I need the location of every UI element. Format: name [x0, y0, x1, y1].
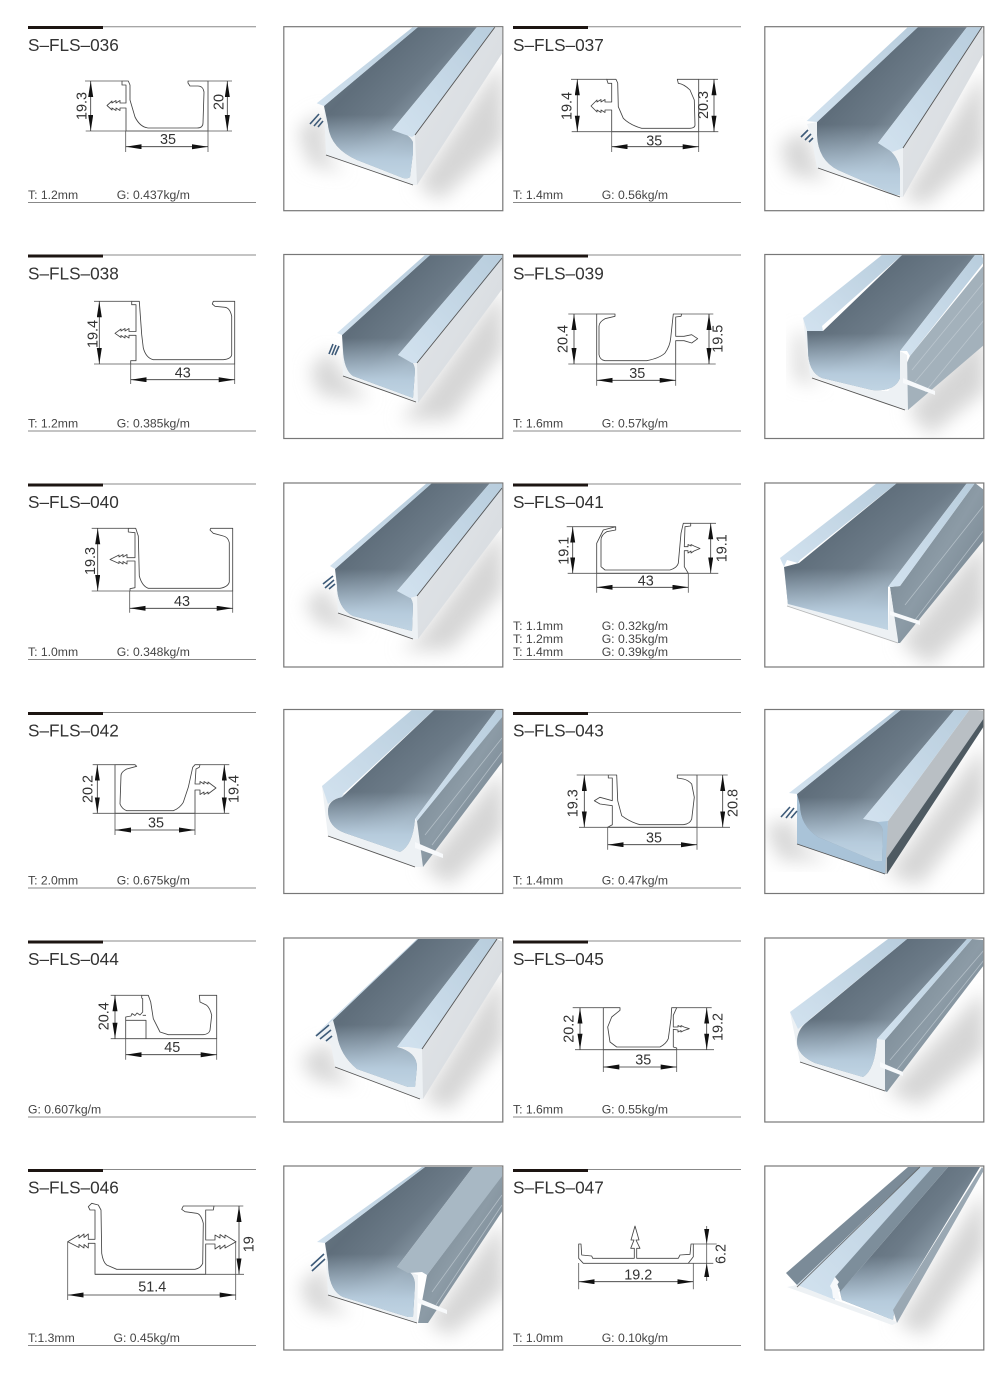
section diagram: 43: [175, 365, 191, 381]
section diagram: 19.4: [85, 320, 101, 348]
title: S–FLS–040: [28, 492, 119, 512]
specifications: G: 0.39kg/m: [602, 645, 668, 659]
product photo: [765, 27, 986, 211]
specifications: T: 1.4mm: [513, 645, 563, 659]
title: S–FLS–037: [513, 35, 604, 55]
product photo: [765, 1166, 986, 1350]
title: S–FLS–045: [513, 949, 604, 969]
section diagram: [85, 301, 235, 384]
panel: S-FLS-045: [513, 938, 986, 1122]
specifications: T: 1.0mm: [28, 645, 78, 659]
specifications: G: 0.32kg/m: [602, 619, 668, 633]
specifications: T: 2.0mm: [28, 874, 78, 888]
panel: S-FLS-040: [28, 483, 504, 667]
header rule: [28, 484, 256, 486]
header rule: [513, 940, 741, 944]
section diagram: [83, 528, 233, 613]
header rule: [513, 712, 741, 715]
panel: S-FLS-039: [513, 254, 986, 438]
specifications: G: 0.385kg/m: [117, 416, 190, 430]
section diagram: 43: [174, 594, 190, 610]
section diagram: 19.5: [711, 325, 727, 353]
panel: S-FLS-046: [28, 1166, 505, 1350]
section diagram: [565, 775, 741, 850]
section diagram: 20.8: [725, 789, 741, 817]
section diagram: 19.1: [715, 534, 731, 562]
height arrows: [704, 1229, 709, 1277]
product photo: [284, 938, 505, 1122]
title: S–FLS–044: [28, 949, 119, 969]
product photo: [284, 1166, 505, 1350]
section diagram: 51.4: [138, 1280, 166, 1296]
specifications: G: 0.57kg/m: [602, 416, 668, 430]
panel: S-FLS-042: [28, 709, 505, 894]
specifications: G: 0.35kg/m: [602, 632, 668, 646]
title: S–FLS–036: [28, 35, 119, 55]
product photo: [765, 709, 986, 894]
section diagram: 6.2: [714, 1244, 730, 1264]
specifications: G: 0.10kg/m: [602, 1331, 668, 1345]
specifications: G: 0.56kg/m: [602, 188, 668, 202]
specifications: G: 0.437kg/m: [117, 188, 190, 202]
specifications: T: 1.6mm: [513, 1102, 563, 1116]
specifications: G: 0.348kg/m: [117, 645, 190, 659]
header rule: [513, 484, 741, 486]
specifications: T: 1.2mm: [28, 416, 78, 430]
section diagram: [96, 995, 217, 1060]
section diagram: 35: [148, 815, 164, 831]
specifications: T: 1.2mm: [28, 188, 78, 202]
title: S–FLS–046: [28, 1178, 119, 1198]
section diagram: [556, 523, 731, 593]
product photo: [284, 709, 505, 894]
section diagram: [81, 765, 242, 835]
section diagram: 20.2: [81, 775, 97, 803]
section diagram: 20.4: [96, 1002, 112, 1030]
title: S–FLS–038: [28, 264, 119, 284]
title: S–FLS–047: [513, 1178, 604, 1198]
section diagram: 20.3: [696, 91, 712, 119]
section diagram: 35: [629, 366, 645, 382]
section diagram: 20: [212, 94, 228, 110]
specifications: [513, 619, 668, 659]
header rule: [28, 254, 256, 258]
section diagram: 35: [646, 134, 662, 150]
section diagram: [68, 1203, 257, 1300]
section diagram: 20.4: [556, 325, 572, 353]
specifications: T: 1.6mm: [513, 416, 563, 430]
section diagram: 19.2: [711, 1013, 727, 1041]
section diagram: 19.3: [83, 547, 99, 575]
section diagram: [75, 81, 232, 152]
section diagram: [556, 314, 727, 386]
section diagram: 35: [646, 830, 662, 846]
title: S–FLS–041: [513, 492, 604, 512]
product photo: [765, 483, 986, 667]
panel: S-FLS-036: [28, 26, 505, 211]
specifications: G: 0.45kg/m: [114, 1331, 180, 1345]
panel: S-FLS-043: [513, 709, 986, 894]
specifications: T: 1.2mm: [513, 632, 563, 646]
section diagram: [561, 1008, 727, 1072]
product photo: [765, 938, 986, 1122]
section diagram: 19.4: [560, 92, 576, 120]
specifications: T: 1.0mm: [513, 1331, 563, 1345]
section diagram: 35: [160, 132, 176, 148]
product photo: [284, 483, 504, 667]
section diagram: 35: [635, 1052, 651, 1068]
section diagram: 45: [164, 1040, 180, 1056]
section diagram: [579, 1226, 730, 1289]
header rule: [28, 1169, 256, 1172]
section diagram: 20.2: [561, 1015, 577, 1043]
section diagram: 19.1: [556, 537, 572, 565]
header rule: [513, 26, 741, 29]
section diagram: 19.2: [624, 1267, 652, 1283]
panel: S-FLS-041: [513, 483, 986, 667]
title: S–FLS–042: [28, 720, 119, 740]
specifications: T: 1.1mm: [513, 619, 563, 633]
product photo: [284, 254, 504, 438]
panel: S-FLS-047: [513, 1166, 986, 1350]
section diagram: 19.3: [565, 789, 581, 817]
header rule: [513, 1169, 741, 1172]
section diagram: 19: [241, 1236, 257, 1252]
header rule: [28, 26, 256, 29]
specifications: T:1.3mm: [28, 1331, 75, 1345]
section diagram: 19.3: [75, 92, 91, 120]
header rule: [28, 712, 256, 715]
panel: S-FLS-037: [513, 26, 986, 211]
header rule: [28, 940, 256, 944]
product photo: [765, 254, 986, 438]
specifications: G: 0.675kg/m: [117, 874, 190, 888]
specifications: G: 0.55kg/m: [602, 1102, 668, 1116]
specifications: G: 0.47kg/m: [602, 874, 668, 888]
specifications: G: 0.607kg/m: [28, 1102, 101, 1116]
panel: S-FLS-044: [28, 938, 505, 1122]
header rule: [513, 254, 741, 258]
section diagram: 43: [638, 573, 654, 589]
panel: S-FLS-038: [28, 254, 504, 438]
product photo: [284, 27, 505, 211]
title: S–FLS–039: [513, 264, 604, 284]
specifications: T: 1.4mm: [513, 188, 563, 202]
section diagram: 19.4: [226, 775, 242, 803]
title: S–FLS–043: [513, 720, 604, 740]
specifications: T: 1.4mm: [513, 874, 563, 888]
section diagram: [560, 79, 718, 152]
